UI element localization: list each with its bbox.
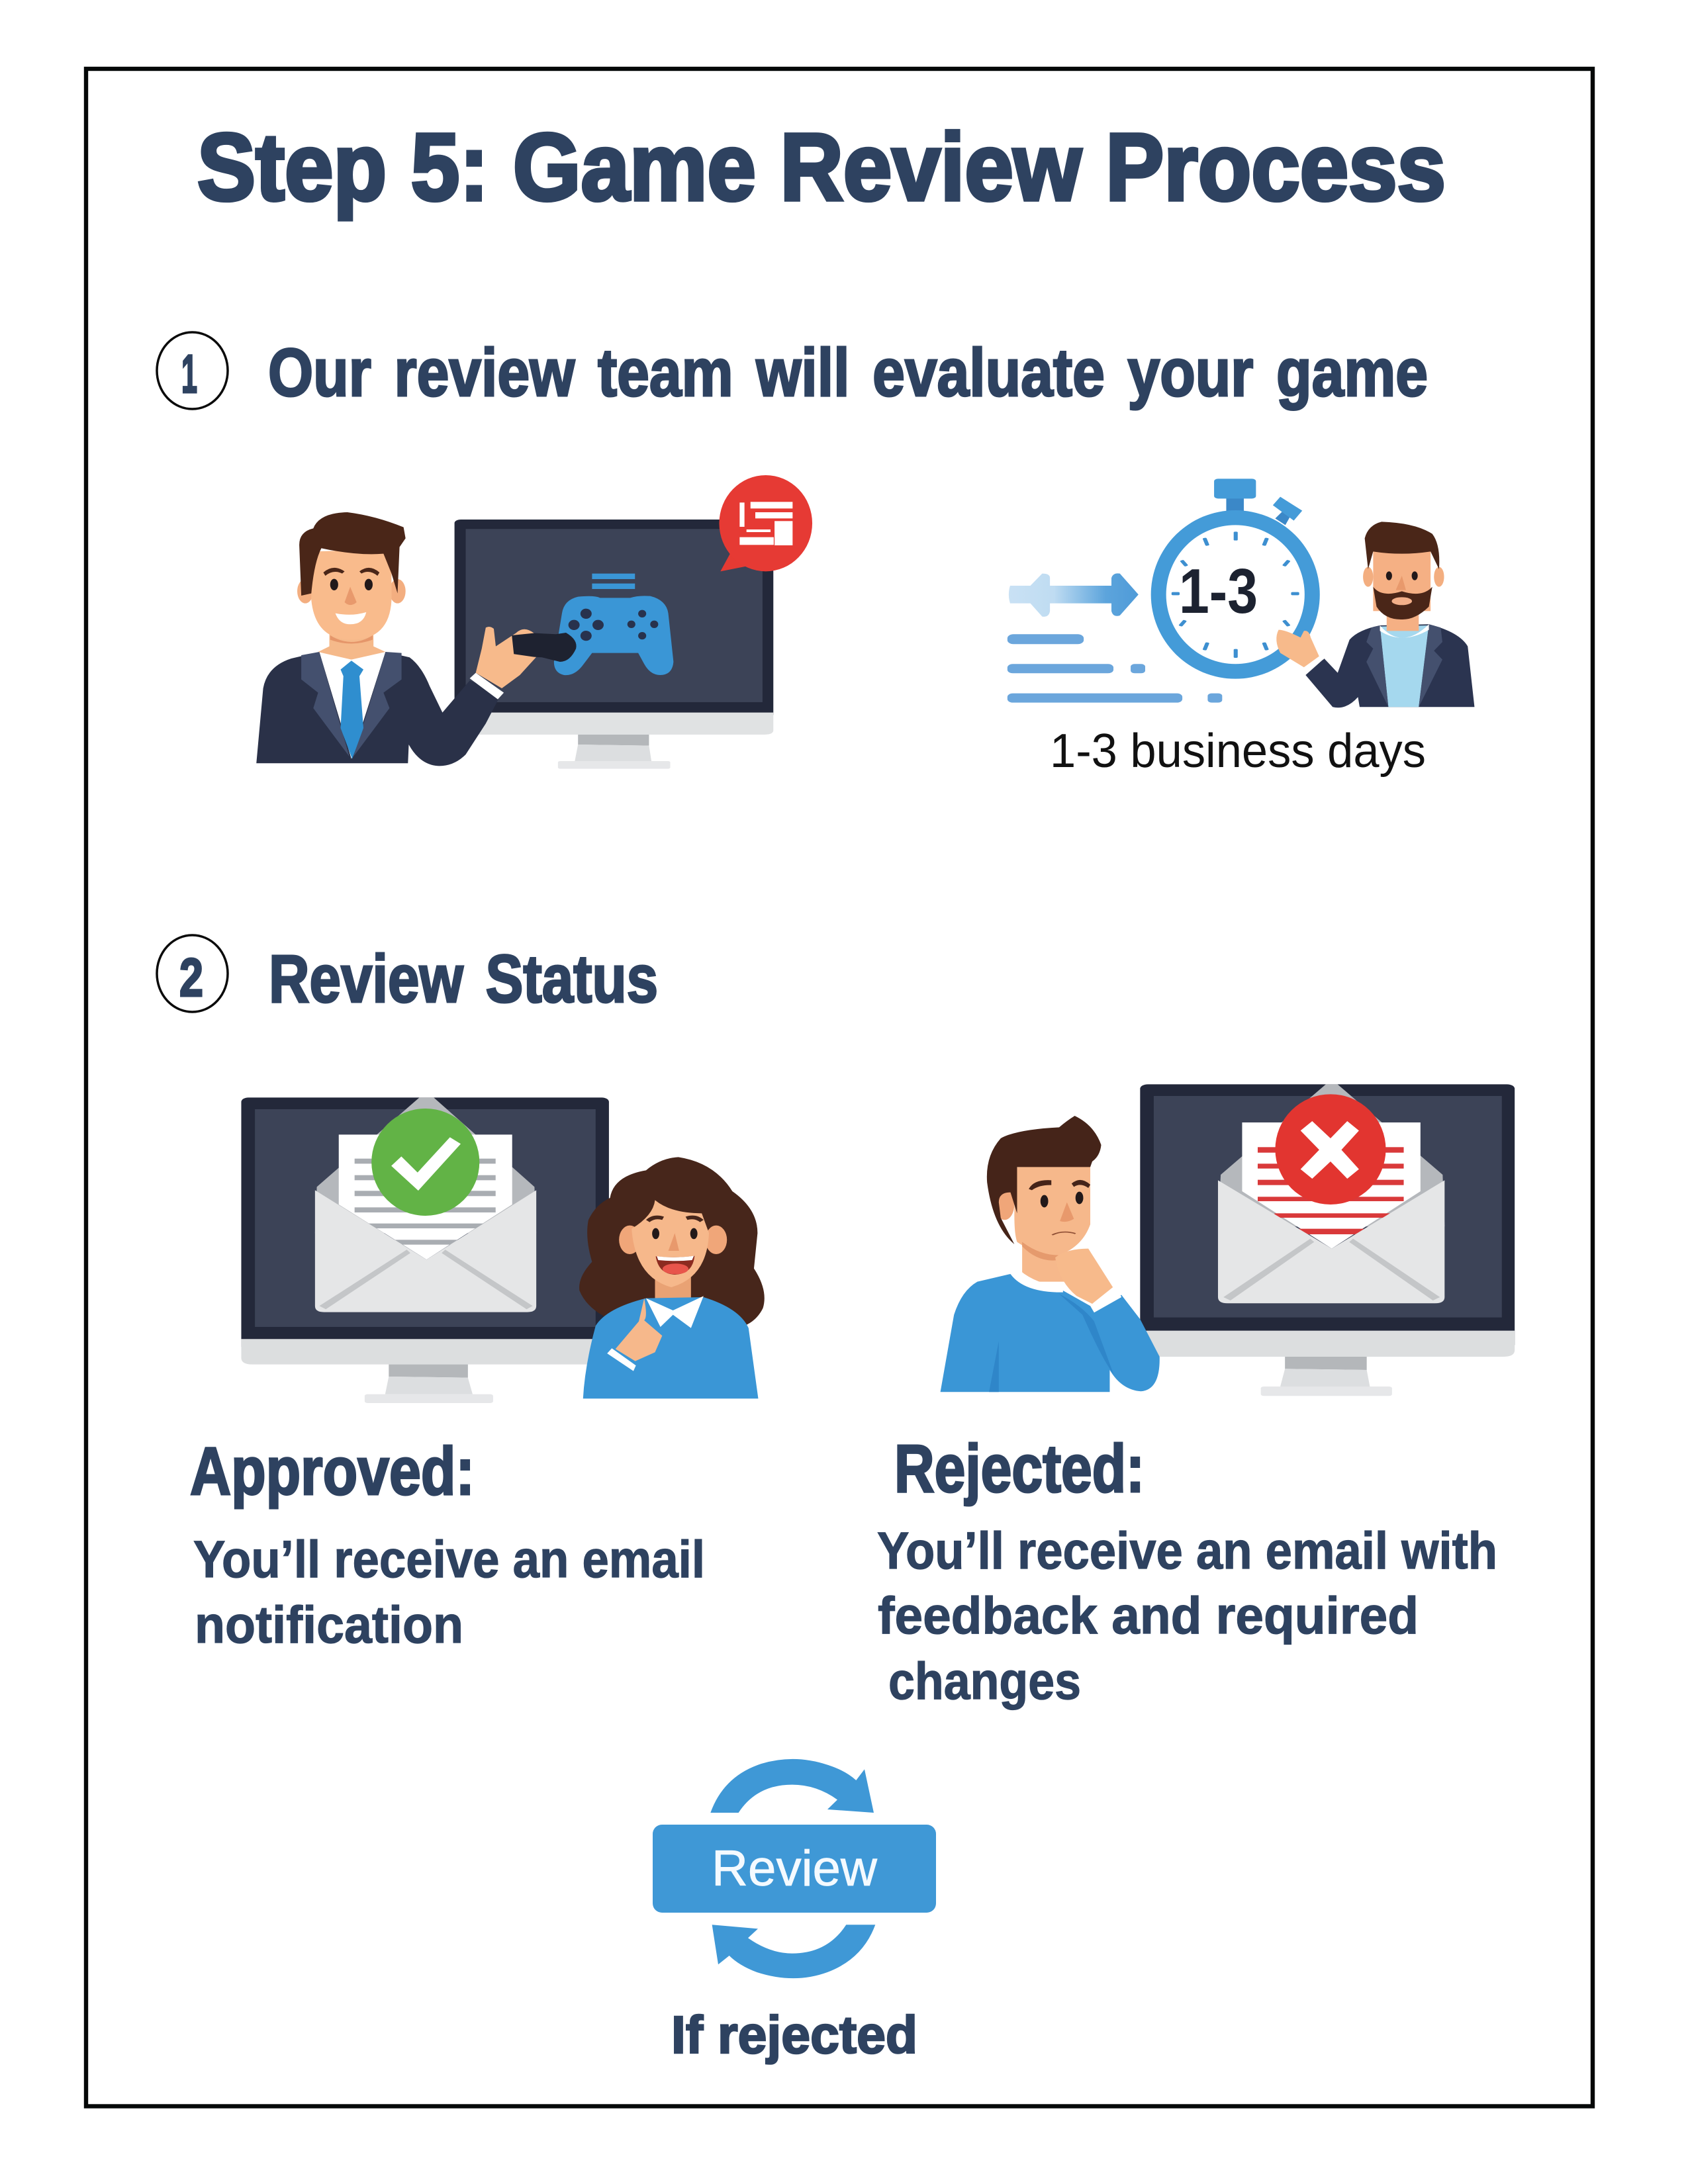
icon: cycle arrows	[710, 1759, 875, 1978]
monitor	[241, 1097, 609, 1403]
review button	[653, 1825, 936, 1913]
number badge 2	[157, 935, 228, 1012]
illustration: reviewer presenting game on monitor	[256, 475, 812, 769]
approved description: notification	[195, 1595, 463, 1654]
monitor	[455, 520, 773, 769]
character: man in suit	[256, 512, 577, 766]
icon: open envelope with red cross	[1218, 1084, 1444, 1303]
character: smiling woman	[579, 1157, 765, 1398]
number badge 1	[157, 332, 228, 409]
rejected description: You’ll receive an email with	[877, 1521, 1497, 1580]
number badge 2: 2	[179, 948, 203, 1008]
number badge 1: 1	[181, 344, 197, 404]
review button: Review	[712, 1841, 878, 1897]
heading text: team evaluation: Our review team will evaluate your game	[268, 335, 1428, 410]
review cycle graphic	[653, 1759, 936, 2064]
illustration: stopwatch with speed arrow and man	[1008, 478, 1474, 707]
caption: if rejected: If rejected	[671, 2005, 917, 2064]
monitor	[1140, 1084, 1515, 1396]
section 2 heading	[157, 935, 658, 1017]
heading text: review status: Review Status	[269, 941, 658, 1017]
caption: business days: 1-3 business days	[1050, 725, 1426, 778]
speed lines	[1008, 634, 1222, 703]
character: thinking man	[941, 1116, 1160, 1392]
section 1 heading	[157, 332, 1428, 410]
rejected block	[877, 1431, 1512, 1710]
rejected label: Rejected:	[894, 1431, 1145, 1506]
icon: stopwatch	[1151, 478, 1320, 679]
title: Step 5: Game Review Process	[197, 114, 1446, 220]
character: bearded man	[1276, 522, 1474, 707]
icon: game controller	[554, 574, 673, 675]
icon: open envelope with green check	[315, 1097, 536, 1312]
icon: red speech bubble	[719, 475, 812, 571]
approved label: Approved:	[190, 1433, 475, 1509]
icon: double arrow	[1009, 573, 1139, 617]
illustration: approved email on monitor with woman	[241, 1097, 765, 1403]
rejected description: changes	[888, 1651, 1081, 1710]
stopwatch label 1-3: 1-3	[1179, 556, 1258, 627]
rejected description: feedback and required	[878, 1586, 1419, 1645]
illustration: rejected email on monitor with thinking man	[941, 1084, 1515, 1396]
approved description: You’ll receive an email	[193, 1529, 705, 1588]
approved block	[190, 1433, 720, 1654]
